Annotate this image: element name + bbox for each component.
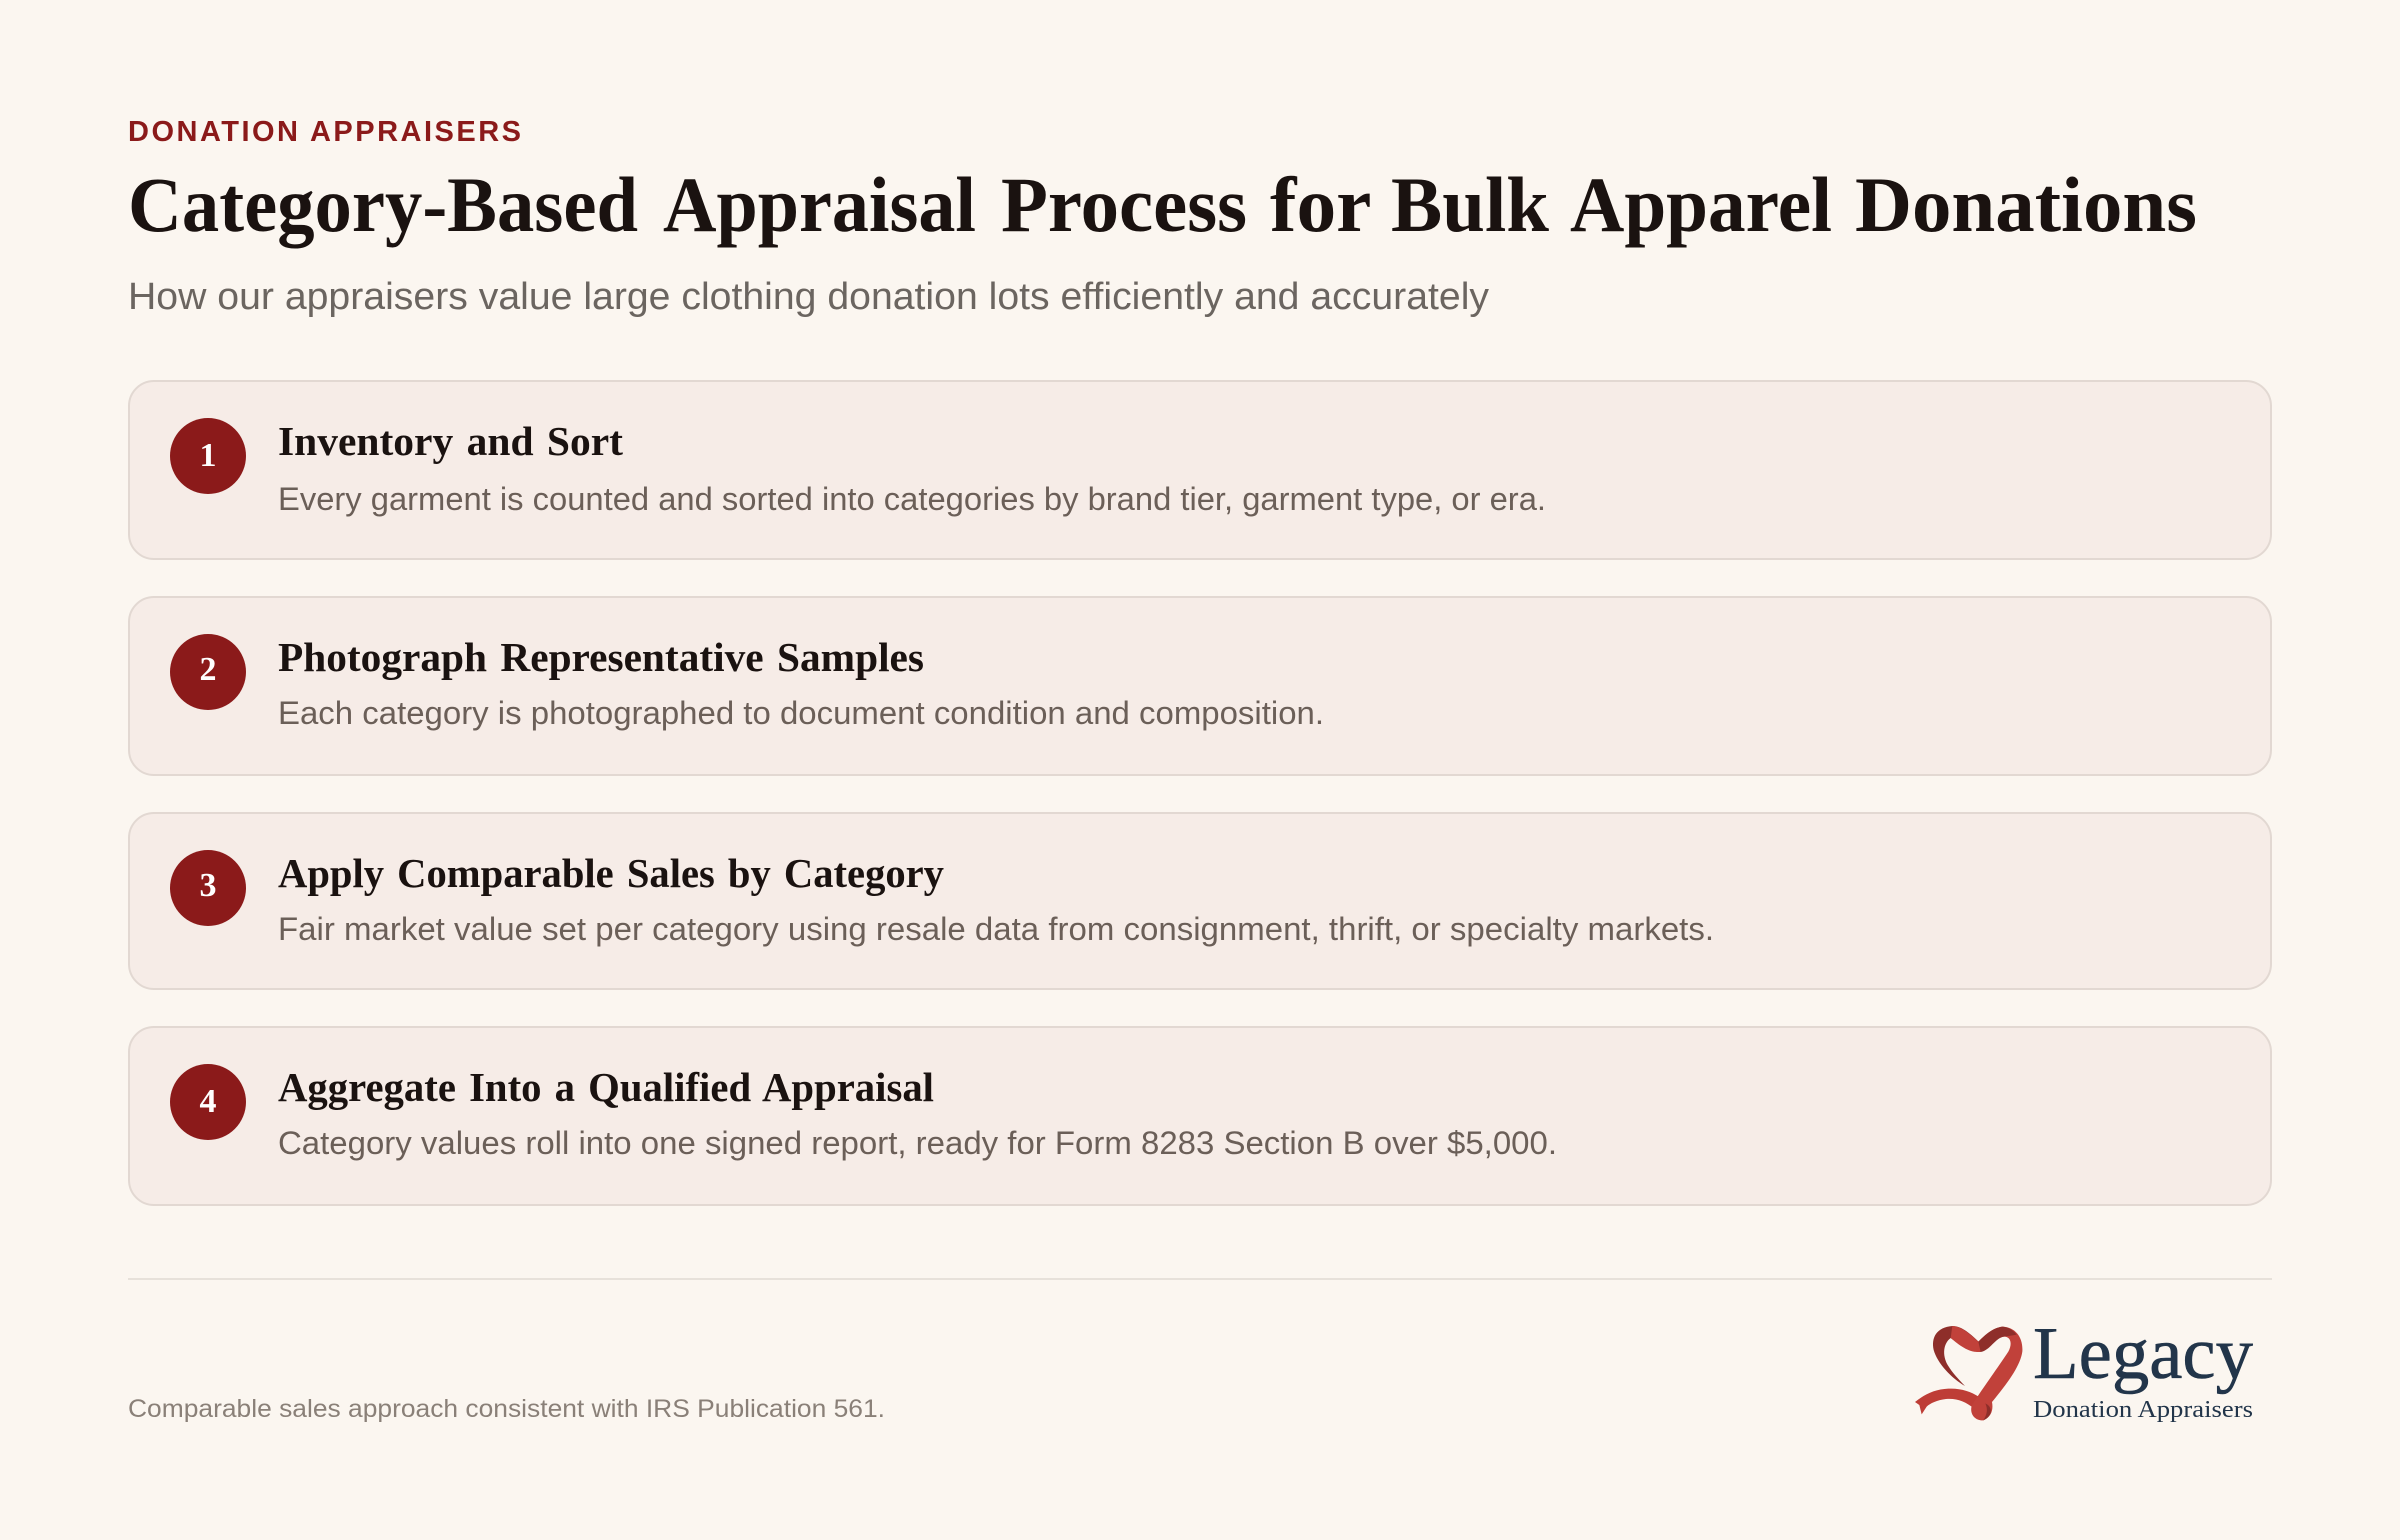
step 1 number badge: 1 (200, 437, 216, 474)
step 4 description: Category values roll into one signed report, ready for Form 8283 Section B over $5,000. (278, 1125, 1557, 1161)
title: Category-Based (128, 161, 638, 248)
step 1 number badge (170, 418, 246, 494)
step 4 number badge (170, 1064, 246, 1140)
title: for (1270, 161, 1370, 248)
subtitle: How our appraisers value large clothing donation lots efficiently and accurately (128, 276, 1489, 318)
step 3 number badge: 3 (200, 867, 216, 904)
logo tagline: Donation Appraisers (2033, 1397, 2253, 1423)
step 2 number badge: 2 (200, 651, 216, 688)
panel: step 3 (129, 813, 2271, 989)
step 2 description: Each category is photographed to document condition and composition. (278, 695, 1324, 731)
step 4 number badge: 4 (200, 1083, 216, 1120)
title: Appraisal (663, 161, 976, 248)
step 3 description: Fair market value set per category using resale data from consignment, thrift, or specialty markets. (278, 911, 1714, 947)
panel: step 4 (129, 1027, 2271, 1205)
step 4 heading: Aggregate Into a Qualified Appraisal (278, 1064, 934, 1110)
step 2 heading: Photograph Representative Samples (278, 634, 924, 680)
panel: step 1 (129, 381, 2271, 559)
logo wordmark: Legacy (2033, 1313, 2253, 1395)
step 1 description: Every garment is counted and sorted into categories by brand tier, garment type, or era. (278, 481, 1546, 517)
title: Donations (1855, 161, 2197, 248)
step 3 heading: Apply Comparable Sales by Category (278, 850, 944, 896)
footnote: Comparable sales approach consistent with IRS Publication 561. (128, 1395, 885, 1423)
panel: step 2 (129, 597, 2271, 775)
title: Process (1001, 161, 1247, 248)
logo (1915, 1313, 2253, 1423)
title: Bulk (1391, 161, 1550, 248)
eyebrow: DONATION APPRAISERS (128, 116, 521, 148)
step 1 heading: Inventory and Sort (278, 418, 623, 464)
step 3 number badge (170, 850, 246, 926)
step 2 number badge (170, 634, 246, 710)
icon: ribbon heart (1915, 1326, 2022, 1420)
title: Apparel (1570, 161, 1832, 248)
header (128, 116, 2197, 318)
